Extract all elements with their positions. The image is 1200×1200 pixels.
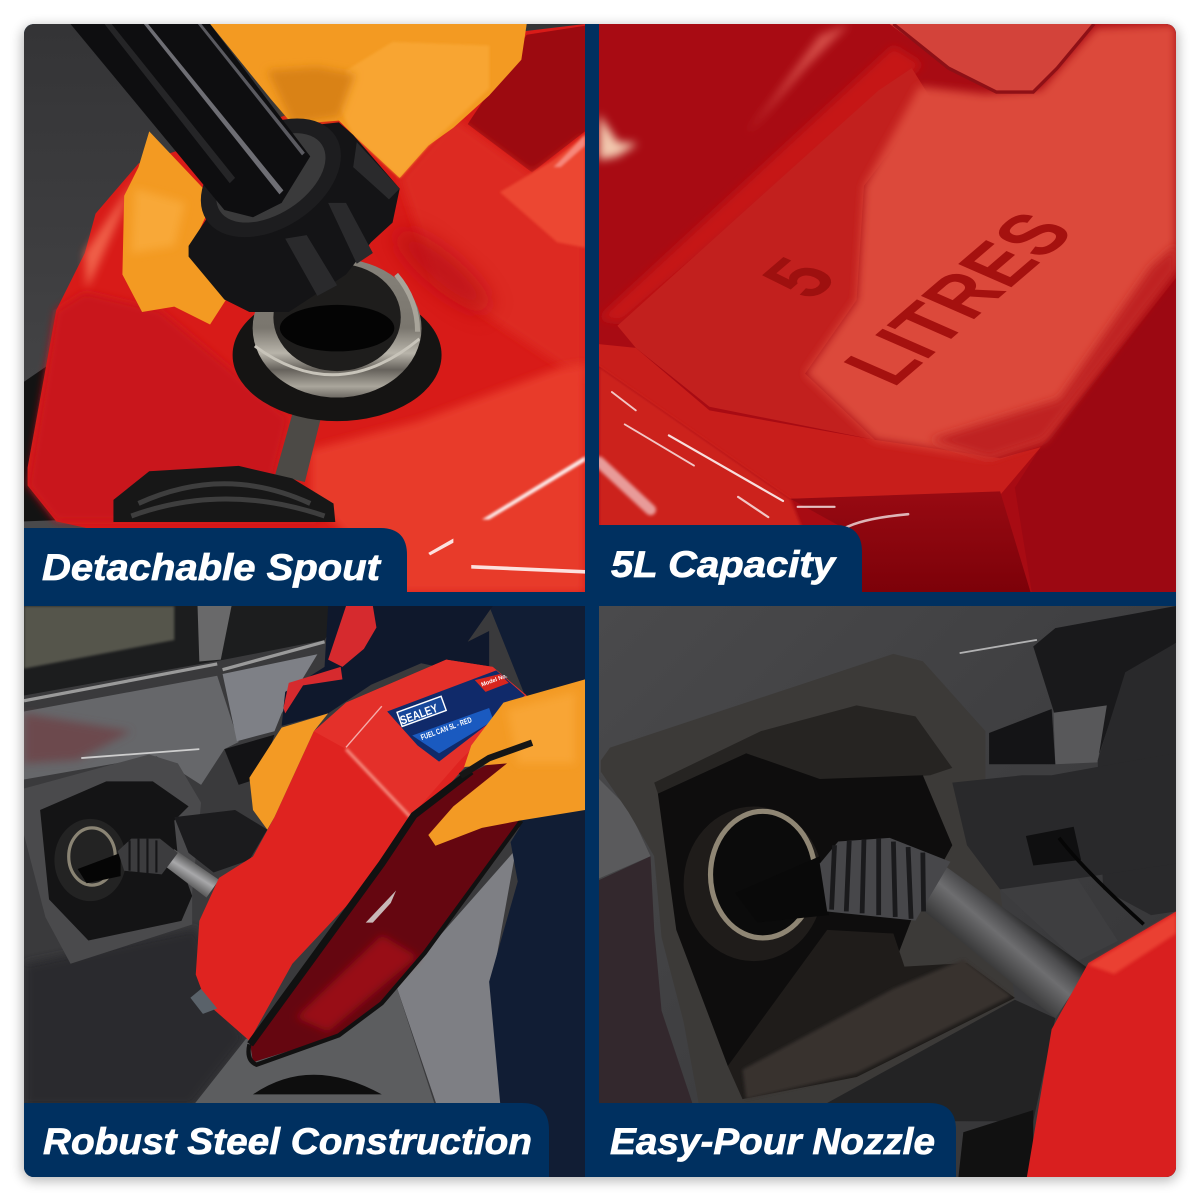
- operator torso and legs: [489, 606, 585, 1178]
- orange gloves: [249, 679, 585, 846]
- can base: [249, 744, 532, 1062]
- red reflection: [24, 713, 131, 763]
- red fuel can body: [28, 24, 585, 593]
- window reflection: [24, 606, 174, 669]
- panel lower corner shade: [930, 245, 1176, 458]
- inner tube: [735, 856, 829, 922]
- panel: detachable spout: [24, 24, 585, 593]
- can highlight: [1088, 913, 1176, 974]
- spare cap at bottom: [113, 466, 335, 522]
- raised panel dark half: [617, 68, 930, 440]
- label: 5L capacity: 5L Capacity: [611, 544, 838, 585]
- red can: [196, 660, 532, 1065]
- label: easy-pour nozzle: [599, 1103, 956, 1177]
- label: robust steel construction: Robust Steel Construction: [43, 1121, 532, 1162]
- left dark panel: [599, 856, 698, 1121]
- side window: [24, 606, 346, 695]
- red can: FUEL CAN 5L - RED: [419, 715, 473, 742]
- top-right black arm: [1033, 606, 1176, 753]
- black spout tube: [71, 24, 310, 217]
- black base at left: [24, 362, 56, 521]
- cable: [1059, 838, 1144, 924]
- corrugated spout: [118, 839, 178, 874]
- flap surround: [601, 654, 1015, 1121]
- red can corner: [1026, 911, 1176, 1183]
- panel: 5L capacity: [599, 24, 1176, 601]
- filler ring: [54, 819, 126, 901]
- gloss streaks: [599, 392, 908, 531]
- orange gloved hands: [122, 24, 527, 325]
- mirror housing: [1098, 643, 1176, 915]
- lower right panel: [1000, 878, 1118, 961]
- light streak: [81, 749, 199, 758]
- filler ring: [684, 807, 823, 961]
- filler panel edge: [893, 24, 1094, 92]
- embossed LITRES: LITRES: [825, 201, 1094, 396]
- car body: [599, 606, 1176, 1183]
- dark gap: [989, 709, 1055, 764]
- floor band: [743, 959, 1011, 1099]
- sleeve: [282, 606, 493, 726]
- can rim over fingers: [461, 743, 532, 776]
- panel: robust steel construction: [24, 606, 585, 1178]
- backdrop: [24, 24, 584, 528]
- steel pipe: [162, 849, 219, 898]
- embossed 5: 5: [743, 247, 857, 309]
- bottom cap: [958, 1110, 1033, 1183]
- corrugated hose: [820, 838, 950, 921]
- red can: SEALEY: [398, 701, 440, 728]
- mounting bracket: [952, 753, 1176, 889]
- red cuff: [283, 606, 376, 713]
- label: 5L capacity: [599, 525, 862, 592]
- lower ledge: [599, 344, 1041, 499]
- label: easy-pour nozzle: Easy-Pour Nozzle: [610, 1121, 935, 1162]
- red can: Model No.: [481, 673, 509, 688]
- scratched panel: [1053, 705, 1107, 764]
- wheel arch: [253, 1075, 382, 1094]
- rear wing: [192, 985, 435, 1107]
- can label: [387, 670, 525, 762]
- window trim: [24, 642, 325, 701]
- filler panel at top: [890, 24, 1094, 92]
- flap inner lip: [654, 705, 952, 794]
- steel nozzle pipe: [915, 867, 1088, 1018]
- left light panel: [599, 779, 651, 878]
- diagonal reflection: [760, 24, 848, 119]
- door panels: [24, 676, 239, 785]
- raised panel light half: [805, 24, 1176, 458]
- lower body shade: [24, 928, 246, 1107]
- bottom dark face: [790, 491, 1033, 601]
- bracket: [174, 810, 267, 873]
- fuel flap surround: [24, 754, 201, 964]
- bottom hook: [190, 989, 217, 1014]
- gasket and strap: [232, 314, 442, 482]
- recess floor: [728, 930, 1015, 1099]
- label: detachable spout: Detachable Spout: [42, 547, 382, 588]
- lower dark body: [794, 1000, 1055, 1121]
- steel filler neck: [253, 259, 422, 398]
- label: robust steel construction: [24, 1103, 549, 1177]
- body scratch: [960, 640, 1037, 653]
- bottom left shine face: [599, 366, 805, 536]
- bracket hole: [1026, 827, 1081, 865]
- fuel flap recess: [40, 781, 192, 941]
- panel: easy-pour nozzle: [599, 606, 1176, 1183]
- edge band: [599, 46, 923, 322]
- car body: [24, 610, 524, 1177]
- door pillar: [198, 606, 232, 661]
- label: detachable spout: [24, 528, 407, 605]
- recess: [658, 753, 952, 1066]
- black collar: [188, 118, 400, 312]
- white glare: [599, 114, 638, 160]
- red steel surface: [599, 24, 1176, 601]
- mirror arm: [224, 735, 274, 785]
- right dark face: [1015, 278, 1176, 601]
